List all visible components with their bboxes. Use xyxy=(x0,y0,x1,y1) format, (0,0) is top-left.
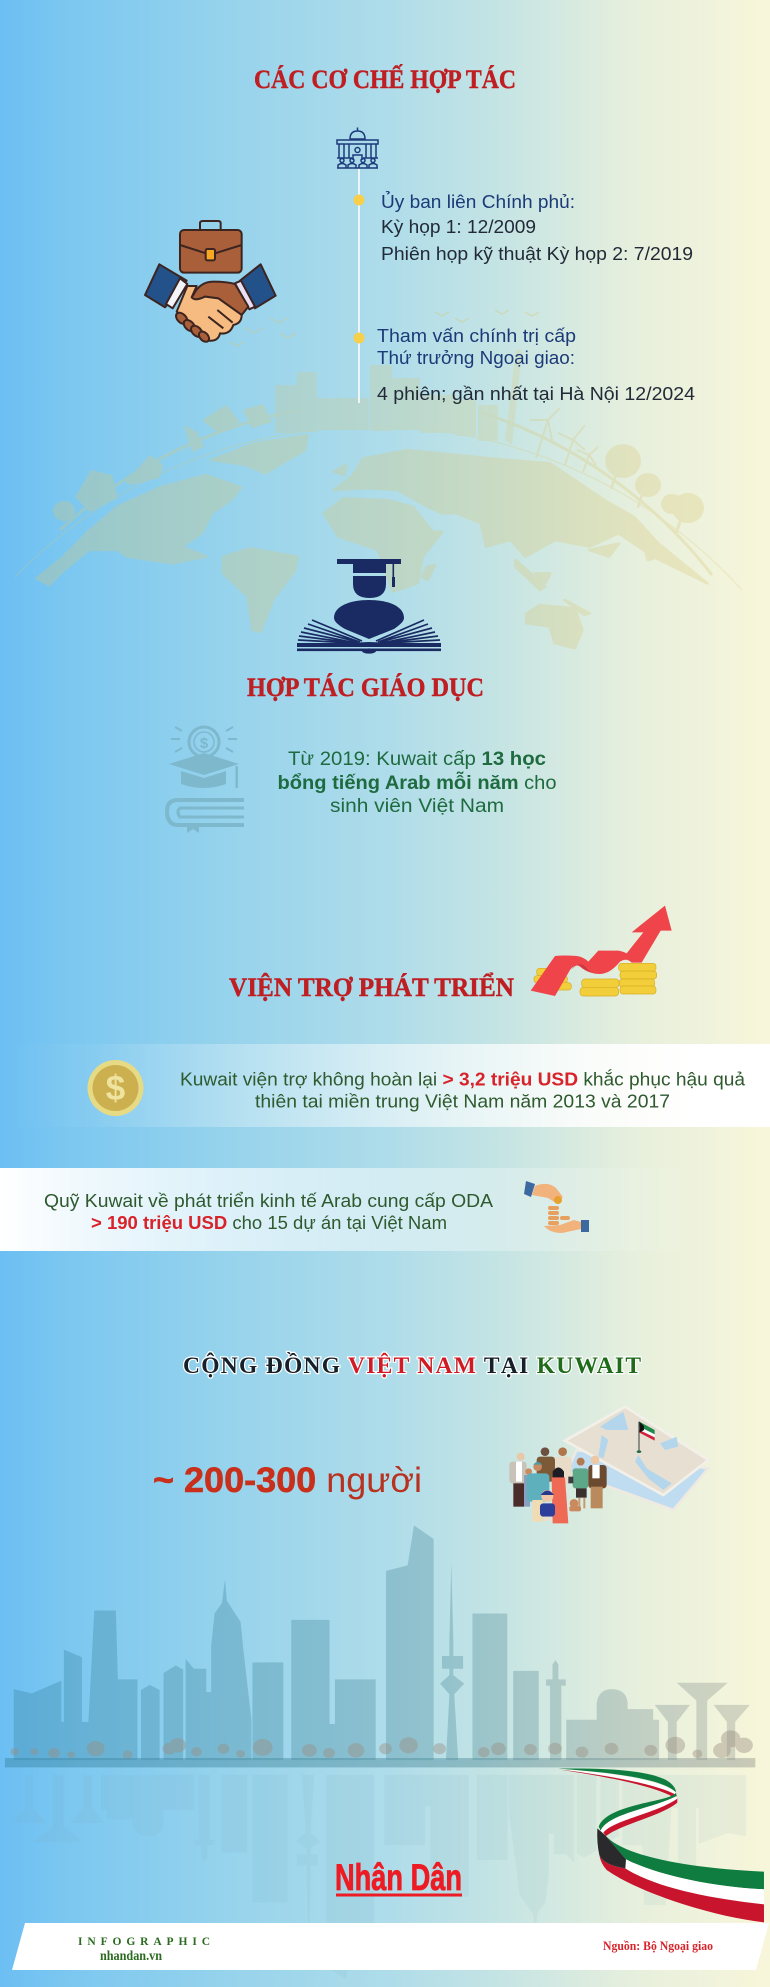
section: development aid xyxy=(0,906,770,1251)
wind turbines xyxy=(530,408,598,472)
icon: parliament building xyxy=(337,128,378,168)
text: scholarship: bổng tiếng Arab mỗi năm cho xyxy=(278,772,556,794)
skyline of Kuwait city xyxy=(5,1525,755,1767)
section: education cooperation xyxy=(167,559,556,833)
stat: number of people: ~ 200-300 người xyxy=(153,1461,422,1500)
footer: source: Nguồn: Bộ Ngoại giao xyxy=(603,1938,713,1953)
heading: cong dong viet nam tai kuwait: CỘNG ĐỒNG VIỆT NAM TẠI KUWAIT xyxy=(183,1352,641,1379)
text: grant aid xyxy=(180,1068,746,1112)
heading: hop tac giao duc: HỢP TÁC GIÁO DỤC xyxy=(247,673,484,702)
text: intergovernmental committee: Kỳ họp 1: 12/2009 xyxy=(381,216,536,237)
text: ODA fund: Quỹ Kuwait về phát triển kinh tế Arab cung cấp ODA xyxy=(44,1191,493,1211)
globe rim xyxy=(15,410,742,590)
text: intergovernmental committee xyxy=(381,191,693,264)
icon: scholarship: $ xyxy=(200,735,209,752)
text: intergovernmental committee: Phiên họp kỹ thuật Kỳ họp 2: 7/2019 xyxy=(381,243,693,264)
icon: handshake and briefcase xyxy=(145,221,276,344)
birds xyxy=(230,310,539,346)
section: vietnamese community xyxy=(5,1352,764,1922)
icon: map with kuwait flag xyxy=(565,1407,708,1510)
text: ODA fund: > 190 triệu USD cho 15 dự án tại Việt Nam xyxy=(91,1213,447,1233)
logo: Nhan Dan: Nhân Dân xyxy=(335,1857,462,1898)
text: political consultation: Thứ trưởng Ngoại giao: xyxy=(377,347,575,368)
text: political consultation: 4 phiên; gần nhất tại Hà Nội 12/2024 xyxy=(377,383,695,404)
trees xyxy=(53,444,704,535)
footer band xyxy=(12,1923,769,1970)
text: scholarship: sinh viên Việt Nam xyxy=(330,796,504,817)
section: cooperation mechanisms xyxy=(145,65,695,404)
icon: hands passing coins xyxy=(524,1181,589,1233)
world map continents xyxy=(37,435,707,648)
icon: group of people xyxy=(509,1447,607,1523)
text: political consultation xyxy=(377,325,695,404)
icon: gold dollar coin: $ xyxy=(106,1069,125,1108)
timeline line xyxy=(358,169,360,403)
timeline dot 1 xyxy=(354,194,364,206)
icon: graduate with open book xyxy=(297,559,441,654)
band: grant aid xyxy=(0,1044,770,1127)
text: scholarship: Từ 2019: Kuwait cấp 13 học xyxy=(288,749,546,770)
band: ODA fund xyxy=(0,1168,770,1251)
timeline dot 2 xyxy=(354,332,364,344)
text: political consultation: Tham vấn chính trị cấp xyxy=(377,325,576,346)
text: ODA fund xyxy=(44,1191,493,1233)
heading: vien tro phat trien: VIỆN TRỢ PHÁT TRIỂN xyxy=(229,973,514,1002)
icon: scholarship xyxy=(167,727,244,833)
text: grant aid: thiên tai miền trung Việt Nam năm 2013 và 2017 xyxy=(255,1092,670,1112)
house car solar panels xyxy=(75,404,272,512)
footer: website: nhandan.vn xyxy=(100,1948,162,1963)
ribbon: kuwait flag xyxy=(558,1769,764,1922)
row of trees xyxy=(10,1730,753,1759)
text: scholarship xyxy=(278,749,556,817)
city on the globe xyxy=(275,350,522,445)
heading: cac co che hop tac: CÁC CƠ CHẾ HỢP TÁC xyxy=(254,65,516,94)
icon: gold dollar coin xyxy=(88,1060,144,1116)
ground strip xyxy=(5,1758,755,1767)
skyline buildings xyxy=(14,1525,750,1760)
globe illustration background xyxy=(15,310,742,648)
footer: infographic label: INFOGRAPHIC xyxy=(78,1936,210,1948)
text: grant aid: Kuwait viện trợ không hoàn lại > 3,2 triệu USD khắc phục hậu quả xyxy=(180,1068,746,1090)
icon: rising arrow and coins xyxy=(531,906,672,996)
skyline reflection xyxy=(10,1775,746,1979)
text: intergovernmental committee: Ủy ban liên Chính phủ: xyxy=(381,191,575,212)
